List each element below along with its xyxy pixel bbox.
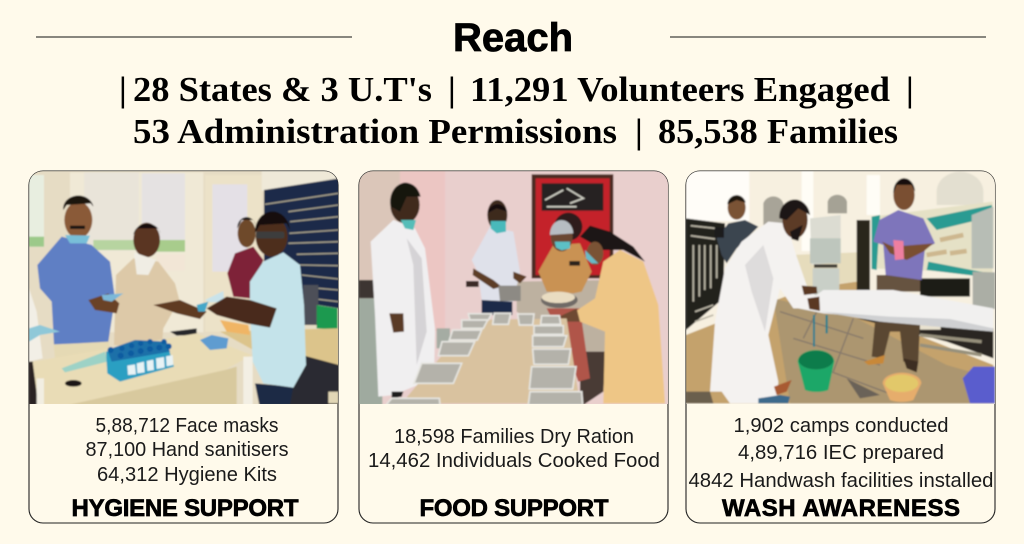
hygiene figures	[86, 415, 288, 486]
panel frame	[29, 171, 338, 523]
man in light shirt	[482, 298, 512, 315]
wash heading: WASH AWARENESS	[722, 495, 960, 522]
reach statistics: 28 States & 3 U.T's	[133, 70, 432, 109]
wash figures: 4842 Handwash facilities installed	[688, 470, 994, 492]
reach statistics: |	[119, 70, 127, 109]
hygiene figures: 64,312 Hygiene Kits	[97, 464, 277, 486]
panel: wash awareness	[686, 171, 996, 523]
wicker basket	[883, 373, 921, 402]
person at far left edge	[29, 288, 43, 362]
person in blue shirt	[54, 342, 110, 358]
black gate	[686, 218, 725, 330]
man in orange shirt	[547, 308, 590, 382]
water jars	[972, 207, 993, 268]
reach statistics: |	[448, 70, 456, 109]
food figures: 18,598 Families Dry Ration	[394, 426, 634, 448]
sofa	[517, 280, 607, 352]
nun in yellow	[575, 250, 665, 403]
hygiene figures: 87,100 Hand sanitisers	[86, 439, 288, 461]
food figures	[368, 426, 660, 472]
photo: hygiene kit distribution	[29, 171, 339, 405]
hygiene figures: 5,88,712 Face masks	[96, 415, 278, 437]
framed painting	[532, 174, 613, 278]
panel: food support	[359, 171, 669, 523]
panel frame	[359, 171, 668, 523]
paved ground	[686, 282, 993, 403]
food figures: 14,462 Individuals Cooked Food	[368, 450, 660, 472]
panel: hygiene support	[29, 171, 339, 523]
person in beige shirt	[114, 258, 179, 348]
wash figures: 4,89,716 IEC prepared	[738, 442, 944, 464]
table with trays	[402, 318, 580, 403]
banner	[872, 202, 993, 273]
table undercarriage	[857, 318, 993, 358]
reach statistics: 85,538 Families	[658, 112, 898, 151]
man in purple shirt	[877, 275, 920, 292]
title: Reach	[453, 16, 573, 60]
blue tub	[963, 367, 995, 403]
person in light blue t-shirt	[255, 383, 293, 405]
white table cover	[798, 290, 993, 328]
reach statistics: |	[635, 112, 643, 151]
reach statistics: |	[906, 70, 914, 109]
reach statistics	[119, 70, 914, 151]
hands and masks	[88, 293, 119, 313]
priest in white	[371, 220, 435, 397]
water pipes	[814, 315, 827, 347]
reach statistics: 11,291 Volunteers Engaged	[470, 70, 891, 109]
reach statistics: 53 Administration Permissions	[133, 112, 617, 151]
boy with phone	[717, 220, 758, 263]
sanitiser bottles	[106, 339, 174, 382]
food heading: FOOD SUPPORT	[420, 495, 609, 522]
green bucket	[798, 350, 834, 392]
photo: handwashing demonstration	[686, 171, 996, 405]
table	[33, 333, 252, 405]
panel frame	[686, 171, 995, 523]
wash figures: 1,902 camps conducted	[734, 415, 948, 437]
priest washing hands	[710, 222, 820, 403]
wash figures	[688, 415, 994, 492]
hygiene heading: HYGIENE SUPPORT	[72, 495, 299, 522]
photo: food preparation	[359, 171, 669, 405]
person in maroon shirt	[227, 247, 263, 298]
